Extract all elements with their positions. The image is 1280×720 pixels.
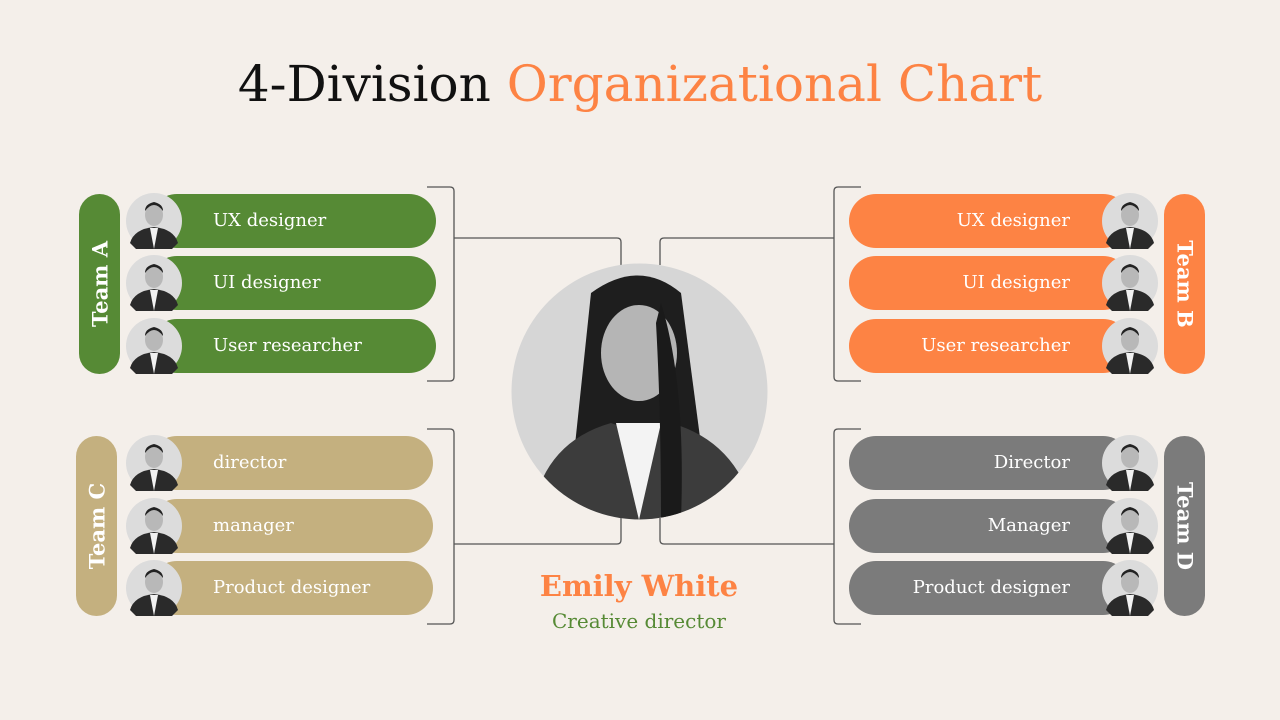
panel: Team D bbox=[849, 436, 1205, 616]
panel: Team A bbox=[79, 194, 436, 374]
text: director bbox=[213, 452, 286, 473]
text: User researcher bbox=[213, 335, 362, 356]
text: UX designer bbox=[213, 210, 326, 231]
text: User researcher bbox=[921, 335, 1070, 356]
text: Team A bbox=[87, 241, 112, 327]
name: Emily White bbox=[540, 569, 738, 603]
text: Team D bbox=[1172, 482, 1197, 570]
text: Team B bbox=[1172, 240, 1197, 328]
panel: Team C bbox=[76, 436, 433, 616]
text: Director bbox=[994, 452, 1070, 473]
text: manager bbox=[213, 515, 294, 536]
text: Manager bbox=[988, 515, 1070, 536]
panel: Team B bbox=[849, 194, 1205, 374]
role: Creative director bbox=[552, 609, 726, 633]
text: UX designer bbox=[957, 210, 1070, 231]
text: Team C bbox=[84, 483, 109, 569]
title: 4-Division Organizational Chart bbox=[238, 55, 1042, 113]
text: UI designer bbox=[962, 272, 1070, 293]
center photo bbox=[512, 264, 768, 520]
text: Product designer bbox=[913, 577, 1070, 598]
text: Product designer bbox=[213, 577, 370, 598]
text: UI designer bbox=[213, 272, 321, 293]
